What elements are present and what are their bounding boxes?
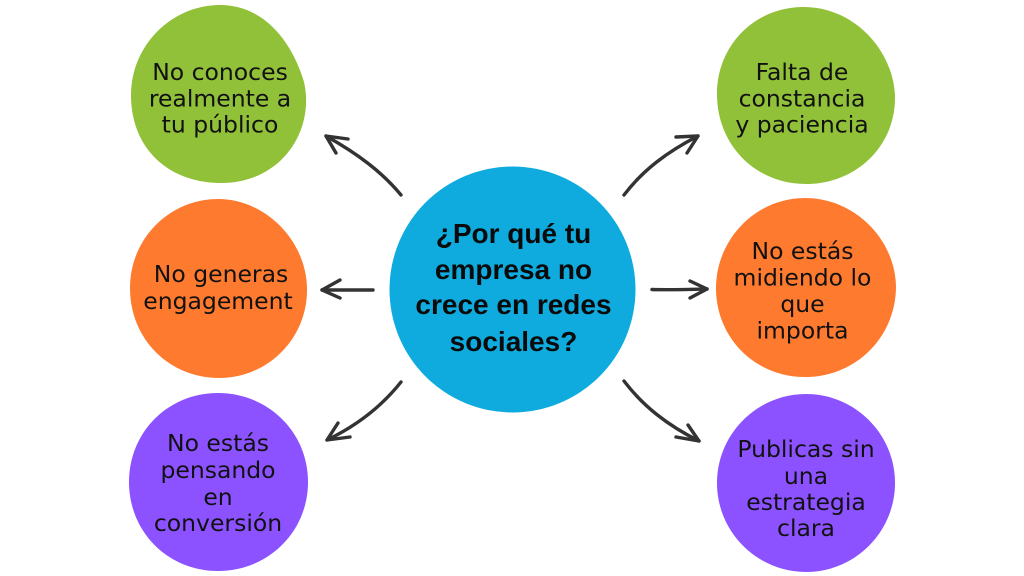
central circle: question: empresa no — [435, 254, 592, 285]
blob: no estas pensando: pensando — [160, 456, 276, 484]
blob: publicas sin estrategia: clara — [777, 514, 835, 542]
blob: no generas engagement: No generas — [154, 260, 288, 288]
blob: no conoces: No conoces — [152, 58, 288, 86]
arrow: bottom right — [624, 381, 699, 441]
blob: no estas pensando: No estás — [167, 429, 269, 457]
blob: falta de constancia: constancia — [739, 84, 865, 112]
blob: no conoces: tu público — [162, 110, 278, 138]
blob: no estas midiendo — [716, 198, 896, 377]
blob: falta de constancia: Falta de — [756, 58, 848, 86]
blob: falta de constancia — [717, 7, 895, 184]
blob: publicas sin estrategia: Publicas sin — [737, 435, 875, 463]
blob: no estas pensando — [129, 393, 308, 571]
blob: publicas sin estrategia: una — [784, 462, 828, 490]
blob: no estas midiendo: No estás — [752, 237, 854, 265]
arrow: top left — [326, 136, 401, 195]
central circle: question: ¿Por qué tu — [436, 218, 591, 249]
blob: no conoces: realmente a — [149, 84, 291, 112]
blob: no conoces — [131, 5, 306, 183]
blob: no estas pensando: en — [203, 483, 233, 511]
blob: no estas midiendo: importa — [756, 316, 848, 344]
arrow: middle left — [322, 280, 373, 298]
blob: no generas engagement: engagement — [143, 287, 293, 315]
arrow: middle right — [652, 281, 707, 298]
central circle: question: sociales? — [450, 326, 577, 357]
arrow: bottom left — [327, 382, 401, 440]
blob: no estas pensando: conversión — [154, 509, 282, 537]
blob: falta de constancia: y paciencia — [735, 110, 869, 138]
blob: no estas midiendo: midiendo lo — [734, 264, 871, 292]
central circle: question — [390, 166, 636, 412]
blob: publicas sin estrategia: estrategia — [746, 488, 866, 516]
central circle: question: crece en redes — [415, 289, 612, 320]
blob: no estas midiendo: que — [780, 290, 825, 318]
blob: no generas engagement — [130, 199, 307, 378]
blob: publicas sin estrategia — [717, 394, 895, 572]
arrow: top right — [624, 136, 698, 195]
